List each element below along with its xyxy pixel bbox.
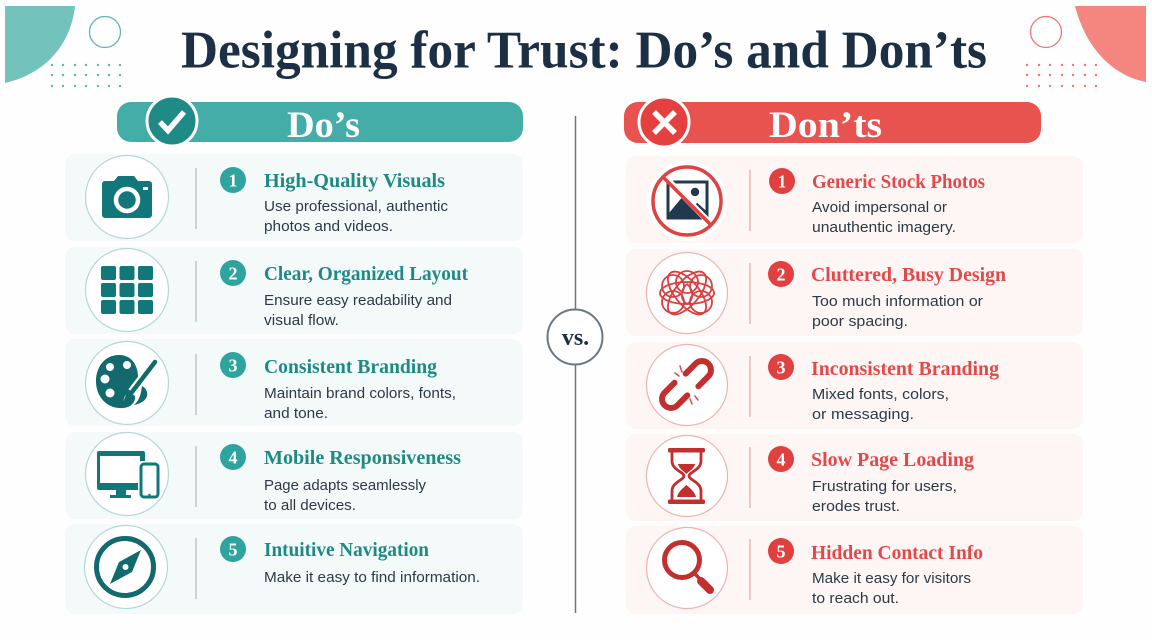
text: Inconsistent Branding: Inconsistent Branding: [811, 359, 999, 380]
description: Too much information or: [812, 294, 983, 310]
icon: broken chain: [646, 344, 728, 426]
text: Intuitive Navigation: Intuitive Navigation: [264, 540, 429, 561]
panel: do 3: [65, 339, 523, 426]
panel: dont 1: [626, 156, 1083, 243]
header: Do's: [117, 96, 523, 146]
decoration: top left teal corner: [5, 6, 121, 87]
center divider with vs badge: [548, 116, 602, 613]
icon: grid: [86, 248, 168, 332]
icon: magnifier: [646, 528, 728, 608]
panel: do 2: [65, 247, 523, 334]
number badge 2: 2: [228, 264, 238, 284]
description: Maintain brand colors, fonts,: [264, 386, 456, 402]
number badge 1: 1: [228, 170, 238, 190]
icon: tangled lines: [646, 252, 728, 334]
text: High-Quality Visuals: High-Quality Visuals: [264, 171, 445, 192]
panel: dont 5: [626, 526, 1083, 614]
panel: do 4: [65, 432, 523, 519]
description: Make it easy to find information.: [264, 570, 480, 586]
icon: devices: [86, 432, 168, 516]
description: unauthentic imagery.: [812, 220, 956, 236]
description: Ensure easy readability and: [264, 293, 452, 309]
description: to all devices.: [264, 498, 356, 514]
center divider with vs badge: vs.: [562, 325, 589, 351]
description: Mixed fonts, colors,: [812, 387, 949, 403]
text: Consistent Branding: Consistent Branding: [264, 357, 437, 378]
number badge 5: 5: [776, 542, 786, 562]
title: Designing for Trust: Do’s and Don’ts: [181, 22, 987, 80]
text: Clear, Organized Layout: Clear, Organized Layout: [264, 264, 468, 285]
number badge 2: [220, 260, 246, 286]
number badge 1: [769, 168, 795, 194]
description: and tone.: [264, 406, 328, 422]
icon: no stock photo: [647, 161, 727, 241]
panel: do 5: [65, 524, 523, 614]
number badge 4: [768, 446, 794, 472]
number badge 5: [768, 538, 794, 564]
text: Mobile Responsiveness: Mobile Responsiveness: [264, 448, 461, 469]
description: Page adapts seamlessly: [264, 478, 427, 494]
number badge 3: [768, 354, 794, 380]
description: visual flow.: [264, 313, 339, 329]
icon: palette and brush: [86, 342, 168, 424]
icon: compass: [84, 526, 168, 608]
number badge 3: [220, 352, 246, 378]
number badge 1: 1: [778, 172, 786, 192]
description: erodes trust.: [812, 499, 900, 515]
text: Cluttered, Busy Design: Cluttered, Busy Design: [811, 265, 1006, 286]
text: Generic Stock Photos: Generic Stock Photos: [812, 172, 985, 193]
heading: Don'ts: Don’ts: [769, 105, 882, 146]
number badge 3: 3: [776, 358, 786, 378]
text: Slow Page Loading: Slow Page Loading: [811, 450, 974, 471]
icon: cross badge: [639, 97, 689, 147]
panel: dont 4: [626, 434, 1083, 521]
number badge 4: 4: [776, 450, 786, 470]
description: photos and videos.: [264, 219, 393, 235]
number badge 2: [768, 261, 794, 287]
icon: camera: [86, 156, 168, 238]
text: Hidden Contact Info: Hidden Contact Info: [811, 543, 983, 564]
number badge 2: 2: [776, 264, 786, 284]
panel: dont 3: [626, 342, 1083, 429]
icon: hourglass: [646, 436, 728, 516]
header: Don'ts: [624, 97, 1041, 147]
decoration: top right coral corner: [1026, 6, 1146, 87]
number badge 1: [220, 167, 246, 193]
description: Make it easy for visitors: [812, 571, 971, 587]
panel: dont 2: [626, 249, 1083, 336]
number badge 3: 3: [228, 356, 238, 376]
description: Avoid impersonal or: [812, 200, 947, 216]
panel: do 1: [65, 154, 523, 241]
description: Use professional, authentic: [264, 199, 448, 215]
number badge 4: [220, 444, 246, 470]
number badge 5: [220, 536, 246, 562]
number badge 5: 5: [228, 540, 238, 560]
number badge 4: 4: [228, 448, 238, 468]
heading: Do's: Do’s: [287, 105, 360, 146]
description: or messaging.: [812, 407, 914, 423]
icon: check badge: [147, 96, 197, 146]
description: poor spacing.: [812, 314, 908, 330]
description: Frustrating for users,: [812, 479, 957, 495]
description: to reach out.: [812, 591, 899, 607]
